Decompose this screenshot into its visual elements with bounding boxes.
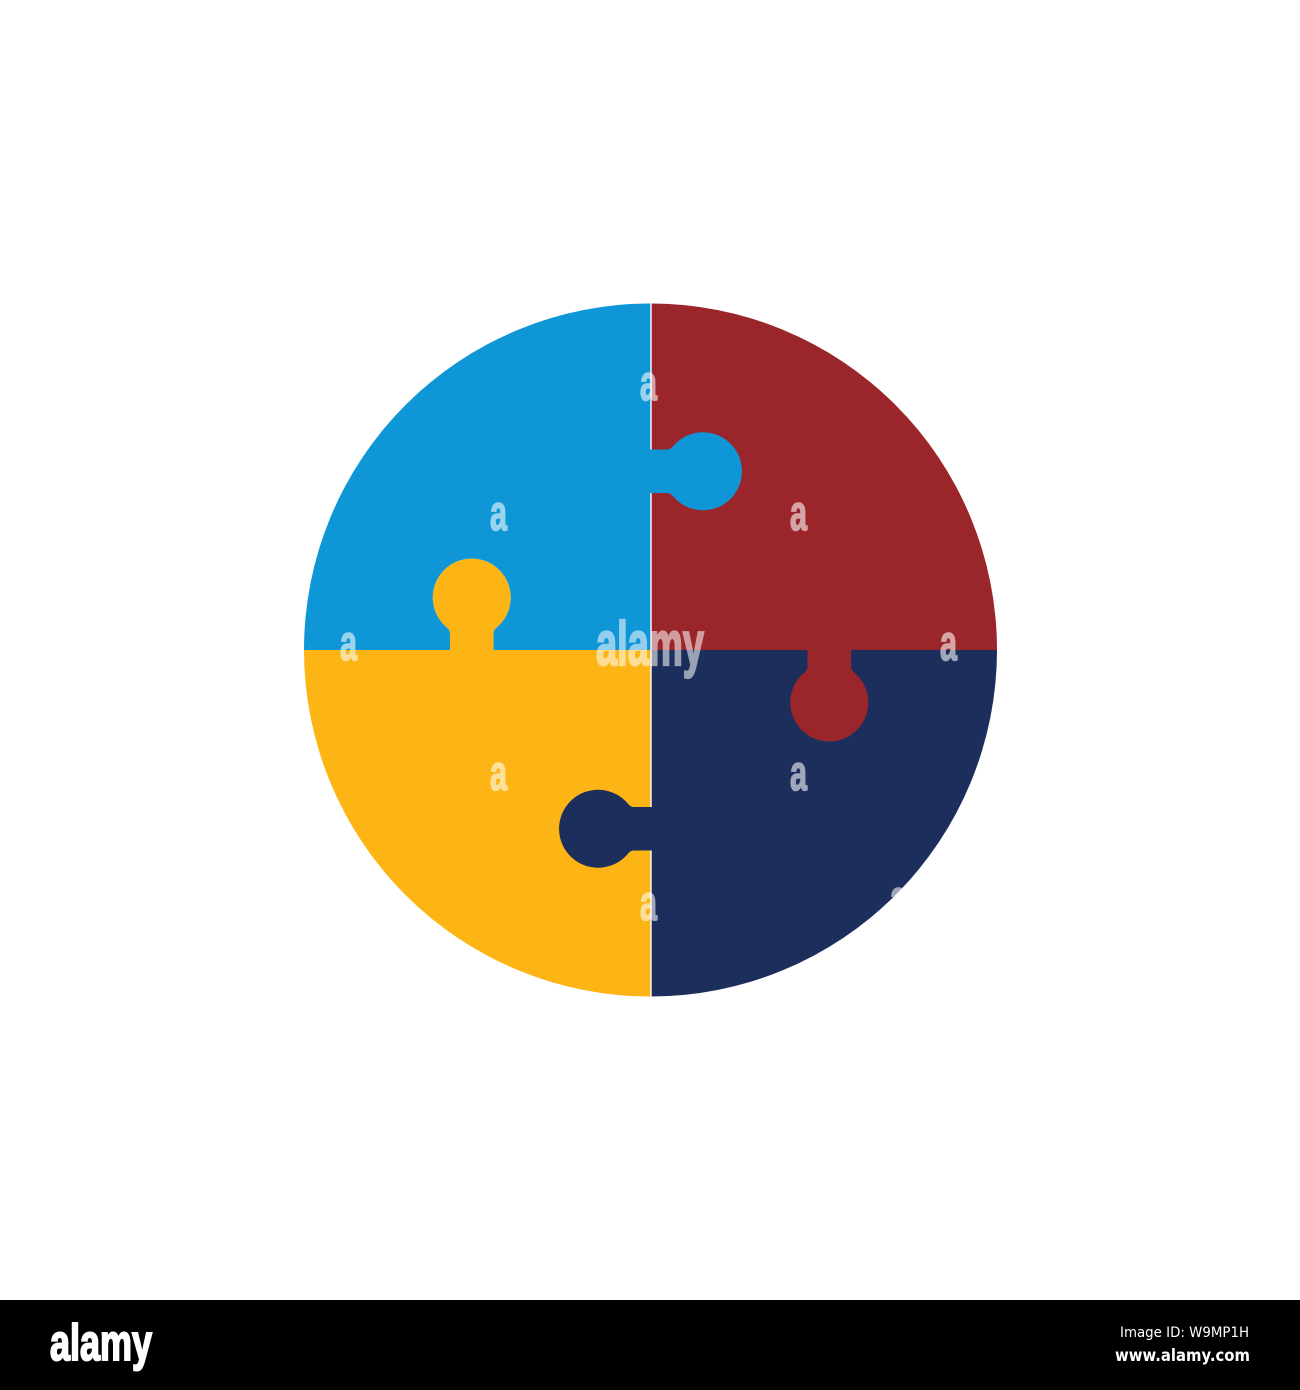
footer bar [0,1300,1300,1390]
puzzle piece: blue, top left [304,304,742,650]
watermark: small repeated letters: a [790,485,808,541]
puzzle piece: red, top right [650,304,997,741]
puzzle piece: yellow, bottom left [304,559,650,996]
watermark: small repeated letters: a [640,875,658,931]
website: www.alamy.com [1115,1346,1250,1366]
watermark: small repeated letters: a [340,615,358,671]
watermark: central logo: alamy [596,610,704,679]
watermark: small repeated letters [340,355,958,931]
footer logo: alamy [50,1314,152,1371]
watermark: small repeated letters: a [790,745,808,801]
watermark: small repeated letters: a [490,485,508,541]
watermark: small repeated letters: a [940,615,958,671]
image id: Image ID: W9MP1H [1120,1325,1249,1341]
puzzle piece: navy, bottom right [559,650,997,996]
watermark: small repeated letters: a [640,355,658,411]
circular puzzle [304,304,997,996]
watermark: small repeated letters: a [890,870,908,926]
watermark: small repeated letters: a [490,745,508,801]
